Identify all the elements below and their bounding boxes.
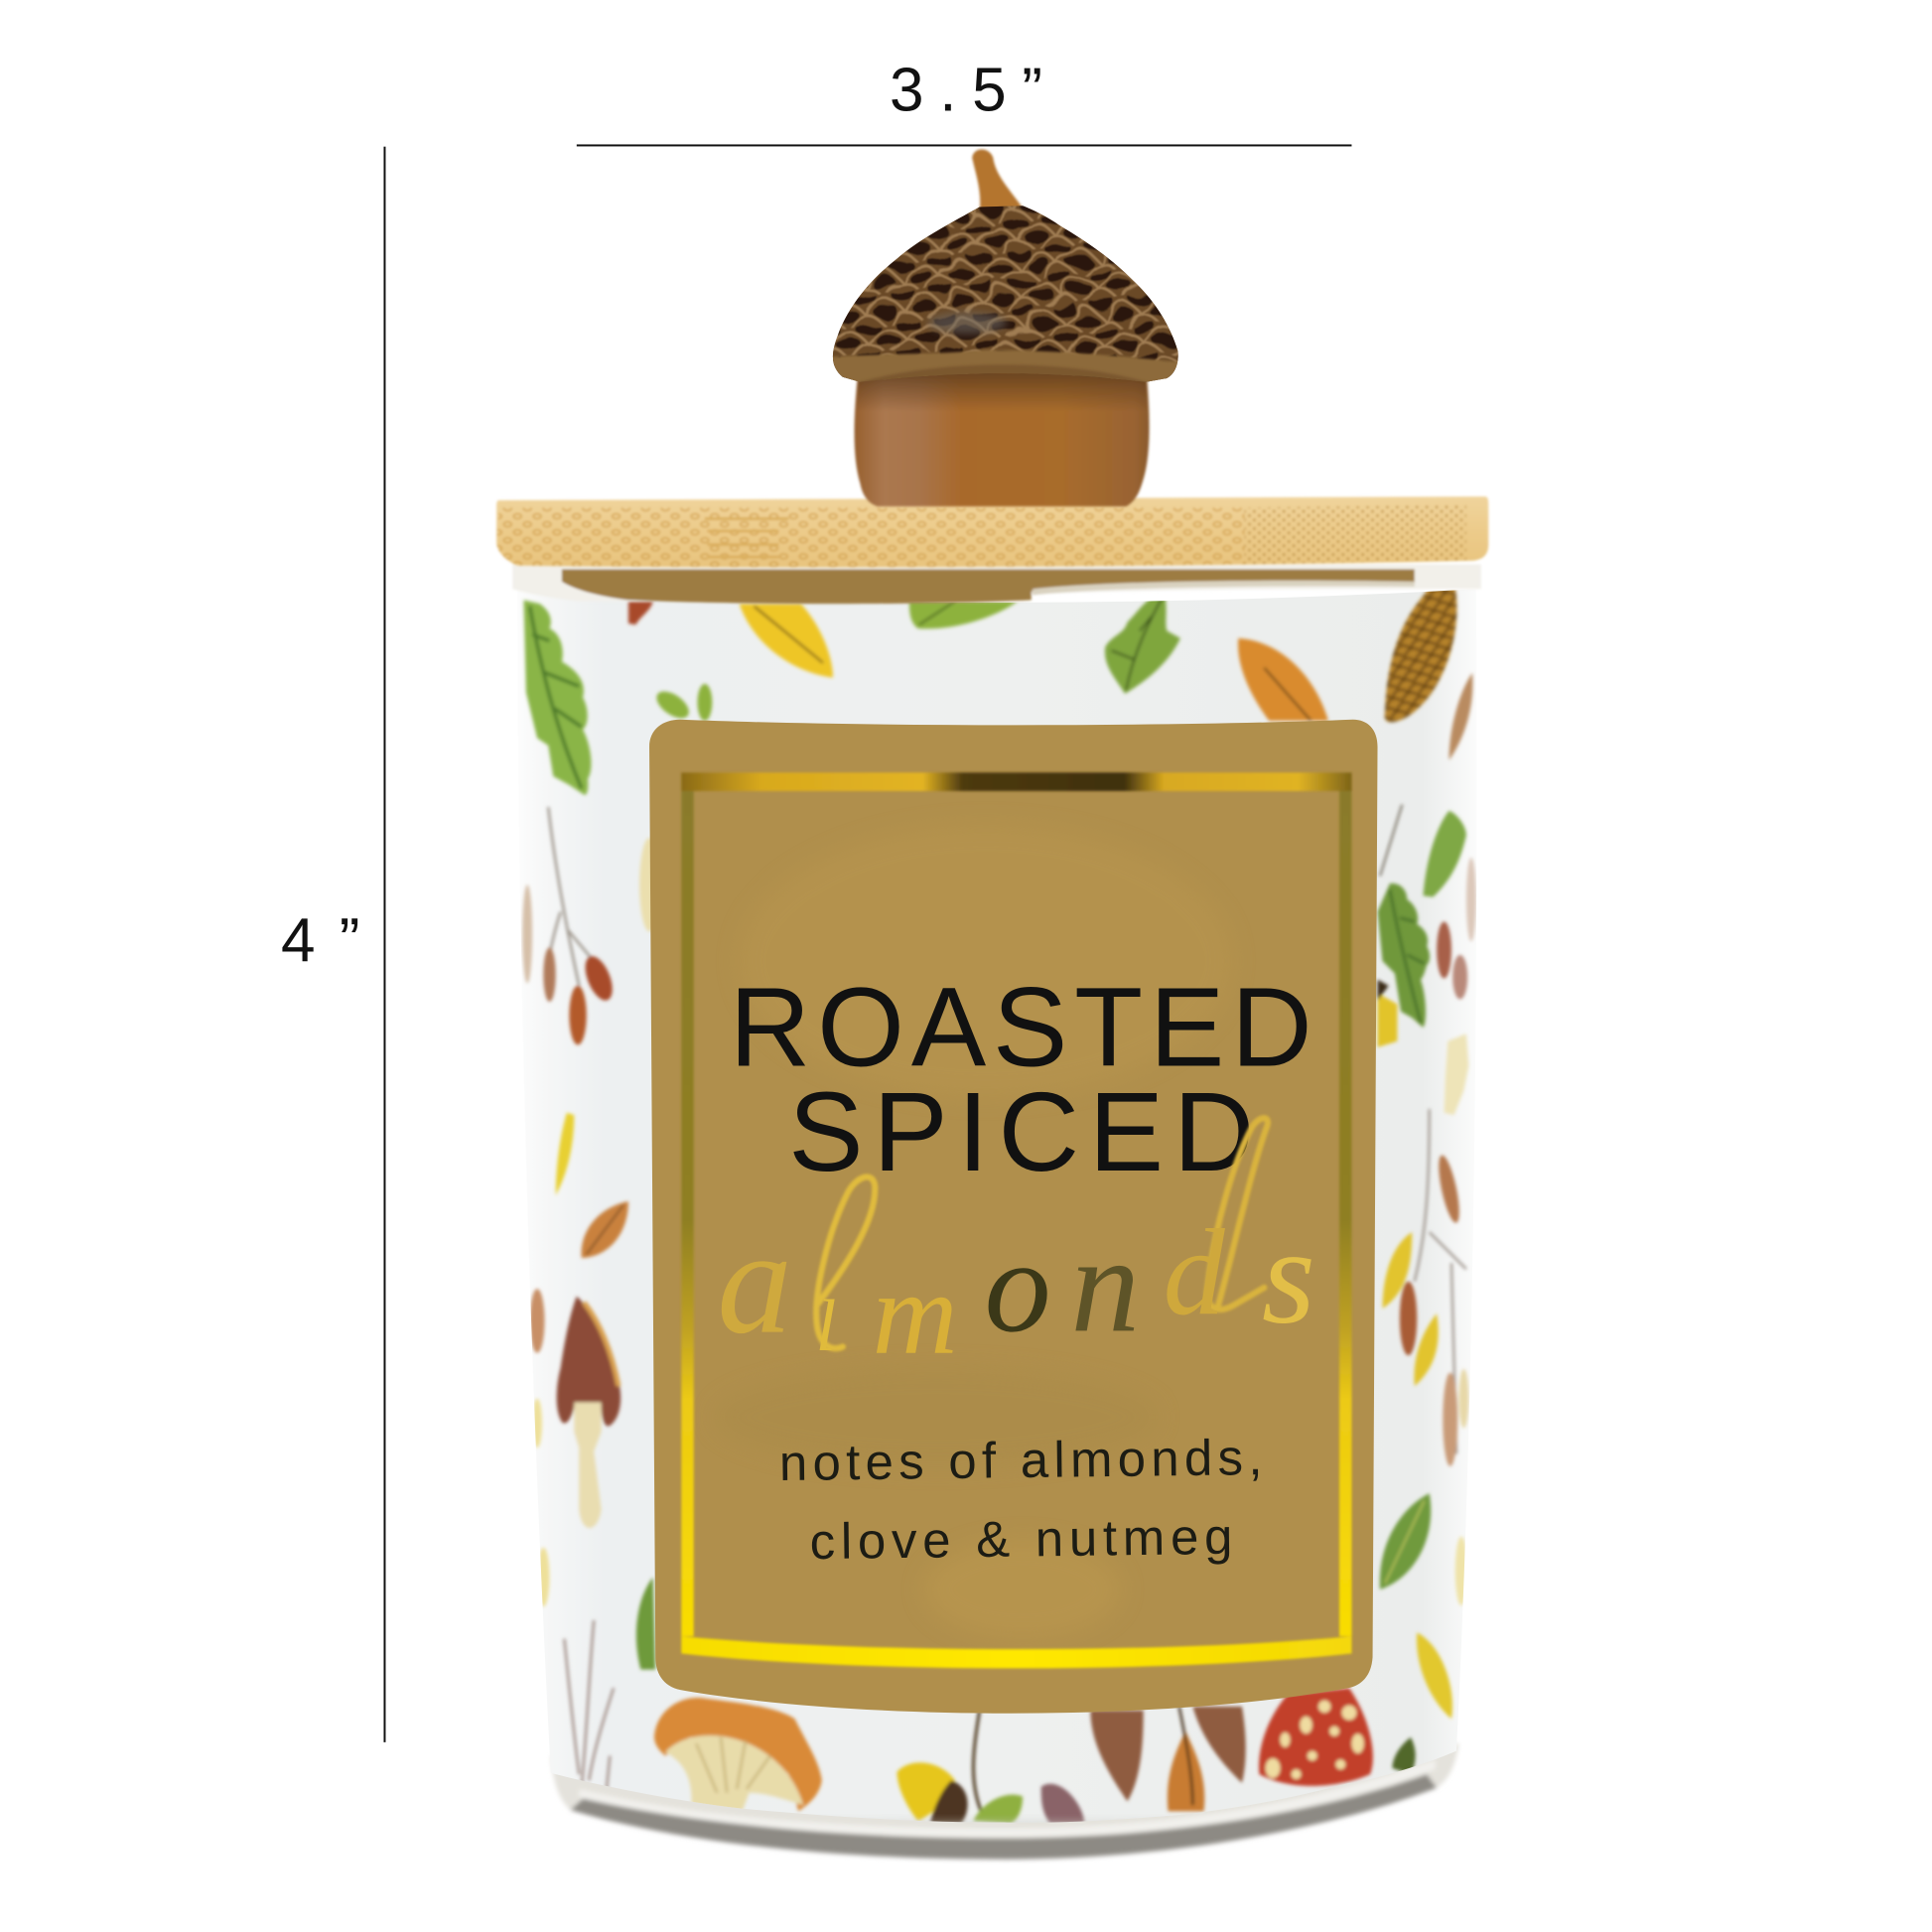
cream blossom right xyxy=(1445,1034,1468,1115)
leaf: small brown right top xyxy=(1449,673,1472,760)
leaf: orange xyxy=(1238,638,1328,721)
leaf: green lobed xyxy=(1105,592,1180,694)
label background xyxy=(649,720,1378,1714)
pale leaves right xyxy=(1466,858,1476,941)
leaf: yellow top xyxy=(740,604,833,678)
lid bamboo texture left xyxy=(496,507,1244,567)
script word: almonds: m xyxy=(873,1248,958,1379)
script word: almonds: s xyxy=(1262,1200,1315,1353)
script word: almonds: o xyxy=(985,1212,1051,1359)
leaf: pale yellow lower left xyxy=(537,1548,550,1606)
acorn nut xyxy=(855,364,1150,506)
leaf: yellow small left xyxy=(556,1113,574,1195)
acorn knob xyxy=(801,149,1207,506)
berries left xyxy=(543,807,618,1044)
gold product label xyxy=(649,720,1378,1714)
oak sprig right xyxy=(1378,804,1430,1028)
height line xyxy=(383,147,385,1742)
jar xyxy=(505,564,1491,1860)
acorn cap xyxy=(801,173,1207,394)
leaf: green behind label xyxy=(636,1578,655,1670)
product name: SPICED xyxy=(788,1069,1254,1194)
mushroom brown xyxy=(557,1297,621,1528)
paper wrap xyxy=(505,579,1491,1840)
chanterelle mushroom xyxy=(654,1698,822,1819)
label shading xyxy=(715,826,1232,1639)
leaf: pale left xyxy=(637,836,651,933)
product name xyxy=(730,965,1312,1194)
width label: 3.5” xyxy=(890,57,1042,125)
acorn and leaf sprig bottom xyxy=(897,1711,1084,1824)
branch right xyxy=(1382,1109,1468,1466)
acorn stem xyxy=(972,149,1024,211)
twigs bottom left xyxy=(564,1620,614,1793)
gold foil frame xyxy=(681,772,1351,1668)
glass jar base xyxy=(551,1743,1458,1860)
leaf: orange-brown left xyxy=(582,1201,628,1258)
red mushroom xyxy=(1259,1688,1373,1786)
pine cone xyxy=(1385,588,1456,722)
leaf: green top xyxy=(909,602,1018,628)
width line xyxy=(577,144,1351,146)
yellow bit right xyxy=(1378,980,1397,1047)
product name: ROASTED xyxy=(730,965,1312,1090)
script word: almonds: a xyxy=(717,1198,792,1365)
leaf: green lower right xyxy=(1380,1493,1431,1589)
scent notes xyxy=(779,1429,1264,1570)
leaf: dark small xyxy=(1392,1737,1416,1774)
script word: almonds: n xyxy=(1070,1208,1140,1361)
leaf: yellow lower right xyxy=(1417,1632,1452,1719)
script ascender loops xyxy=(816,1118,1268,1348)
sprig: small green leaves xyxy=(652,684,712,724)
leaf: oak left xyxy=(523,600,591,795)
scent notes: notes of almonds, xyxy=(779,1429,1263,1491)
red-brown seeds right xyxy=(1437,921,1467,1000)
scent notes: clove & nutmeg xyxy=(809,1508,1233,1570)
leaf: small red-brown top xyxy=(628,602,653,624)
script word: almonds: d xyxy=(1164,1203,1226,1340)
paper soft shadow bottom xyxy=(523,1820,1484,1840)
leaf: left faint xyxy=(530,1289,545,1353)
script word: almonds: l xyxy=(816,1286,836,1367)
product dimension infographic xyxy=(282,68,1490,1863)
leaf: brown left faint xyxy=(522,885,532,983)
glass rim under lid xyxy=(512,564,1481,604)
leaf: green right xyxy=(1423,811,1466,897)
lid bamboo texture right xyxy=(1244,505,1466,564)
leaves brown bottom xyxy=(1090,1707,1246,1811)
bamboo lid xyxy=(496,496,1488,567)
height label: 4” xyxy=(281,906,359,975)
